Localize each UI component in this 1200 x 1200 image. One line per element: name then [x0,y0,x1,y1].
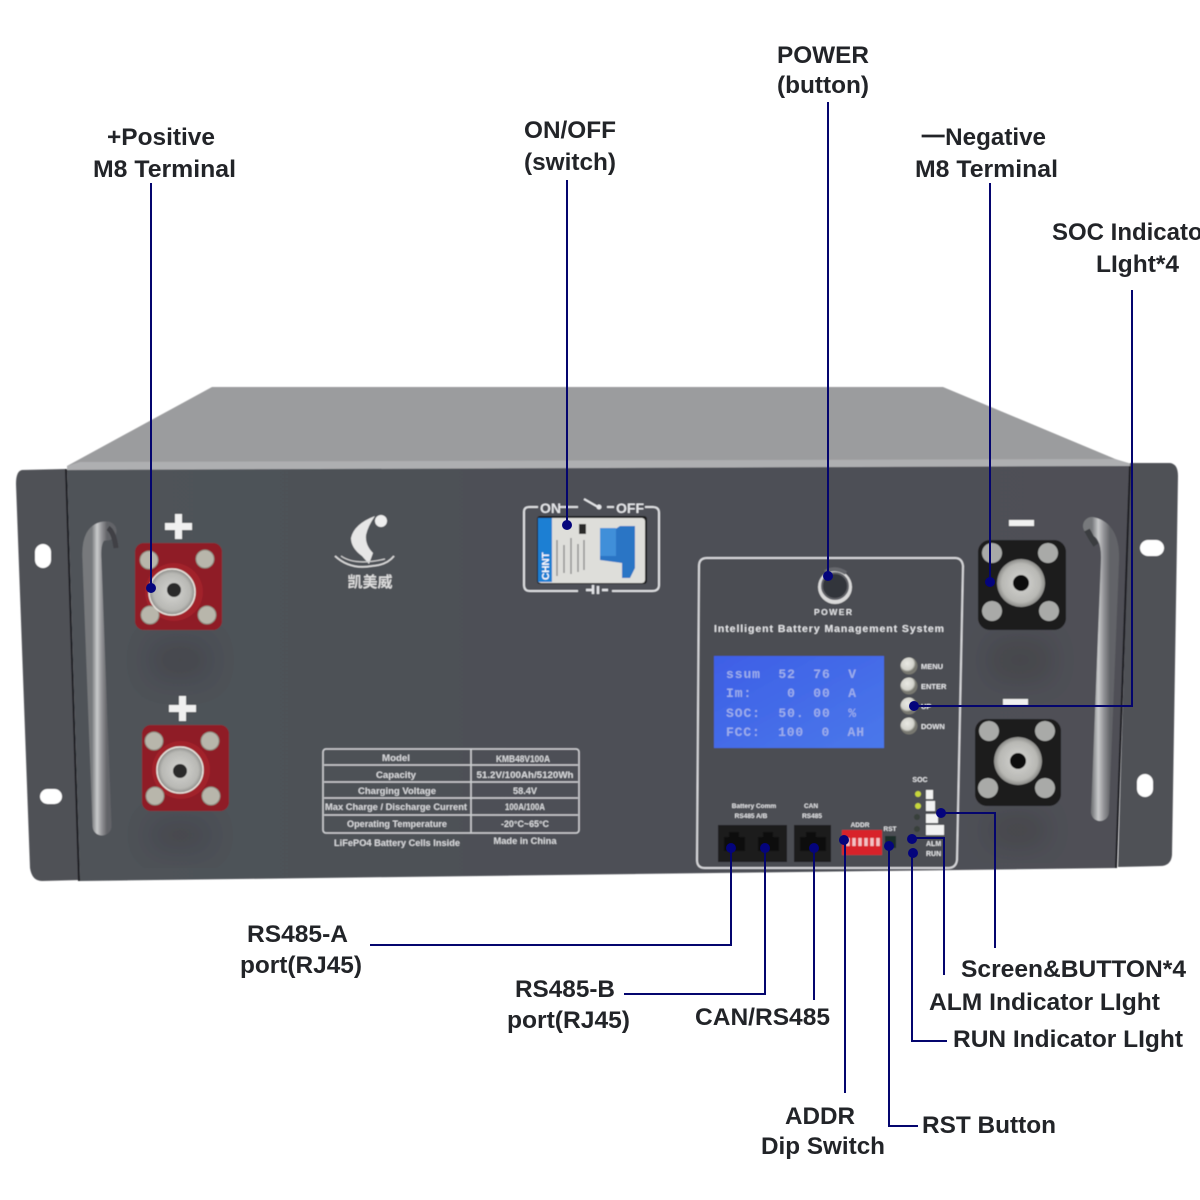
label: positive terminal: M8 Terminal [93,156,236,183]
positive terminal 1 [135,514,222,680]
negative terminal 1 [978,520,1066,680]
ADDR dip switch: ADDR [851,822,870,829]
leader: SOC indicator [909,290,1132,711]
leader: CAN/RS485 [809,843,819,1000]
label: on/off switch: (switch) [524,149,616,176]
label: SOC indicator: LIght*4 [1096,251,1180,278]
label: negative terminal [915,124,1058,183]
spec table: KMB48V100A [496,754,550,765]
top cover [67,387,1132,472]
SOC indicator lights: SOC [912,777,928,784]
label: RST button: RST Button [922,1112,1056,1139]
leader: negative terminal [985,183,995,587]
label: power button: POWER [777,42,869,69]
label: power button: (button) [777,72,869,99]
spec table: Charging Voltage [358,786,436,797]
label: ADDR dip switch: ADDR [785,1103,855,1130]
negative terminal 2 [975,699,1061,845]
ALM and RUN lights: RUN [926,851,941,858]
brand logo: 凯美威 [347,573,393,591]
leader: screen and button [936,808,995,948]
BMS control panel [697,558,963,868]
label: CAN/RS485: CAN/RS485 [695,1004,830,1031]
LCD screen: Im: 0 00 A [726,686,856,701]
label: RS485-A [240,921,362,979]
label: ALM indicator: ALM Indicator LIght [929,989,1160,1016]
CAN RS485 port [794,803,831,862]
positive terminal 2 [142,696,229,850]
label: on/off switch: ON/OFF [524,117,616,144]
leader: power button [823,102,833,581]
menu buttons: DOWN [921,722,945,731]
leader: RUN [908,848,947,1041]
leader: ALM [907,834,944,975]
spec table: 51.2V/100Ah/5120Wh [476,770,574,781]
right rack ear [1118,463,1178,867]
label: power button [777,42,869,99]
RJ45 battery comm ports: RS485 A/B [735,813,768,820]
label: ADDR dip switch: Dip Switch [761,1133,885,1160]
front face [66,466,1130,881]
spec table [323,749,579,849]
breaker body: CHNT [541,552,552,580]
RJ45 battery comm ports: Battery Comm [732,803,776,810]
leader: positive terminal [146,183,156,593]
spec table: Capacity [376,770,417,781]
label: negative terminal: 一Negative [921,124,1046,151]
LCD screen [714,656,884,748]
label: positive terminal [93,124,236,183]
spec table: Model [382,753,410,764]
SOC indicator lights [912,777,944,835]
menu buttons: ENTER [921,682,947,691]
ALM and RUN lights [926,841,941,858]
label: RS485-B [507,976,630,1034]
RST button [884,826,897,848]
LCD screen: SOC: 50. 00 % [726,706,856,721]
power button [814,569,852,617]
left handle [92,528,116,826]
LCD screen: ssum 52 76 V [726,667,856,682]
leader: RS485-B [624,843,770,994]
label: RS485-A: RS485-A [247,921,348,948]
ALM and RUN lights: ALM [926,841,941,848]
spec table: LiFePO4 Battery Cells Inside [334,838,460,849]
menu buttons [900,658,947,734]
LCD screen: FCC: 100 0 AH [726,725,864,740]
CAN RS485 port: CAN [804,803,818,810]
label: RS485-A: port(RJ45) [240,952,362,979]
label: positive terminal: +Positive [107,124,215,151]
label: SOC indicator [1052,219,1200,278]
RJ45 battery comm ports [718,803,787,862]
menu buttons: MENU [921,662,943,671]
spec table: Operating Temperature [347,819,447,830]
leader: on/off switch [562,180,572,530]
label: on/off switch [524,117,616,176]
label: ADDR dip switch [761,1103,885,1160]
spec table: Max Charge / Discharge Current [325,802,468,813]
mounting holes [35,540,1164,804]
spec table: -20°C~65°C [501,819,549,830]
RST button: RST [884,826,897,833]
CAN RS485 port: RS485 [802,813,822,820]
label: RS485-B: port(RJ45) [507,1007,630,1034]
menu buttons: UP [921,702,931,711]
label: RUN indicator: RUN Indicator LIght [953,1026,1183,1053]
spec table: 58.4V [513,786,538,797]
battery unit [16,387,1178,881]
breaker switch: OFF [616,500,644,516]
power button: POWER [814,607,852,617]
leader: RST [884,841,918,1126]
label: RS485-B: RS485-B [515,976,615,1003]
spec table: Made in China [494,836,557,847]
ADDR dip switch [842,822,882,855]
leader: ADDR [839,835,849,1093]
spec table: 100A/100A [505,802,545,813]
label: screen and button: Screen&BUTTON*4 [961,956,1187,983]
breaker switch: ON [540,500,561,516]
panel title: Intelligent Battery Management System [714,623,944,635]
right handle [1087,526,1110,812]
breaker switch [524,499,659,594]
leader: RS485-A [370,843,736,945]
left rack ear [16,469,80,881]
brand logo [335,515,394,591]
label: negative terminal: M8 Terminal [915,156,1058,183]
